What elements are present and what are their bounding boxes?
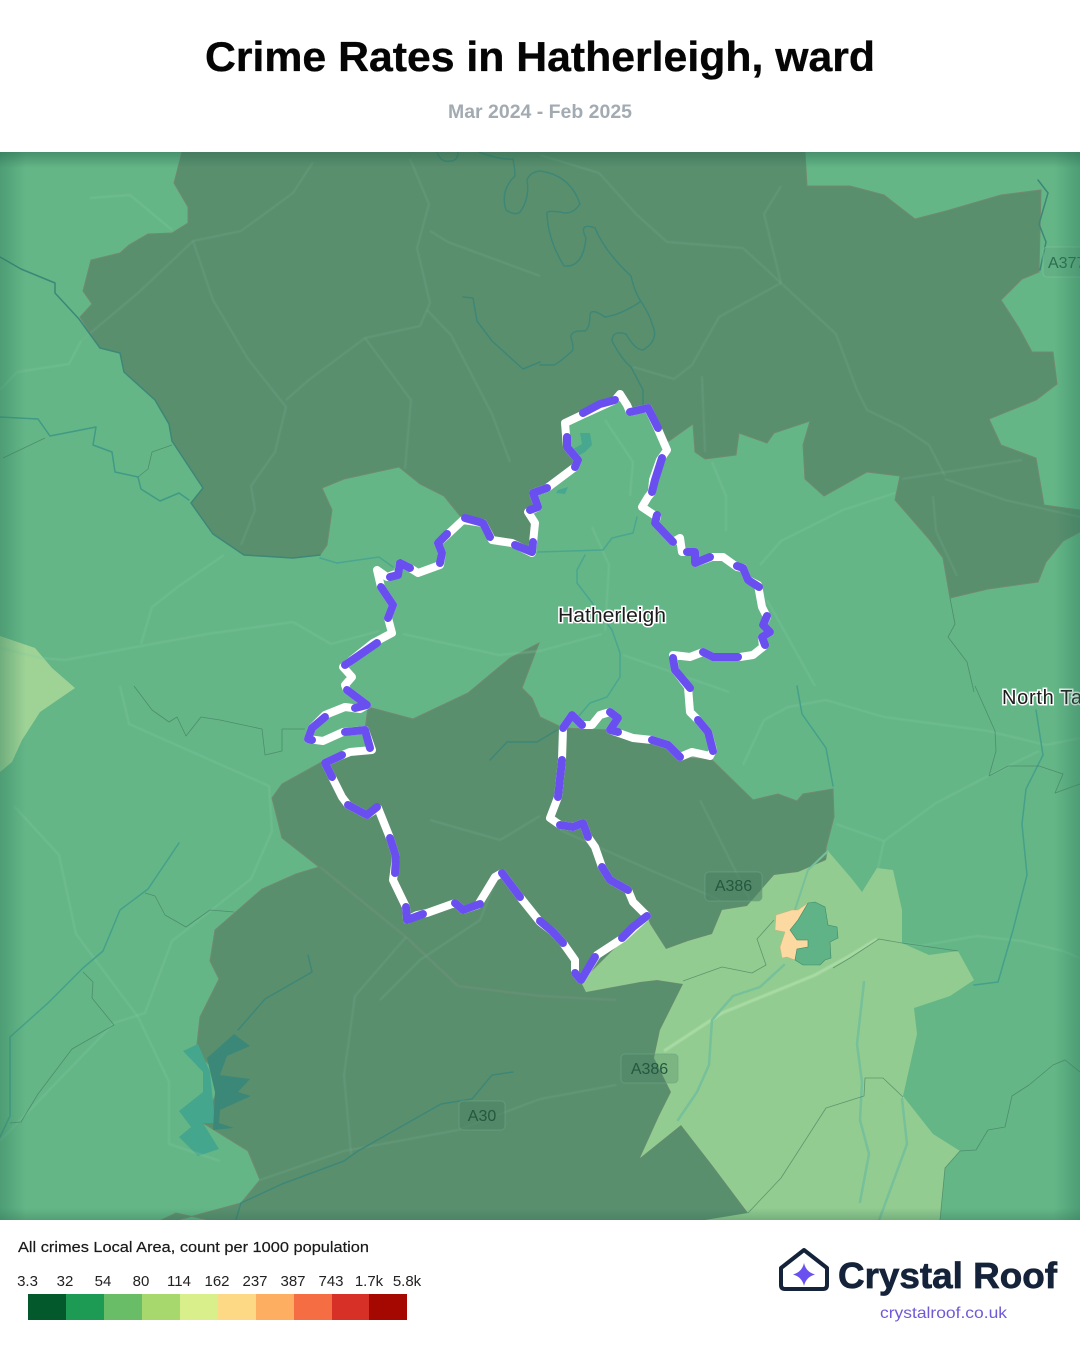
road label: A377: [1043, 247, 1080, 277]
roads: [0, 195, 1080, 1161]
region: northern dark green area: [80, 152, 1080, 598]
map: [0, 152, 1080, 1226]
road label: A30: A30: [468, 1108, 496, 1125]
legend colour scale: [28, 1294, 407, 1320]
road label: A30: [459, 1101, 505, 1130]
legend labels: 387: [280, 1273, 306, 1290]
reservoir: [179, 1034, 251, 1156]
legend labels: 743: [318, 1273, 344, 1290]
lakes near ward: [556, 433, 592, 494]
rivers: [0, 152, 1048, 1226]
legend labels: 5.8k: [393, 1273, 422, 1290]
legend title: All crimes Local Area, count per 1000 population: [18, 1239, 369, 1256]
region: far-left light green area: [0, 636, 75, 772]
road label: A386 lower: A386: [631, 1061, 668, 1078]
legend labels: 3.3: [17, 1273, 38, 1290]
legend labels: [17, 1273, 422, 1290]
legend: [17, 1239, 422, 1320]
legend labels: 32: [57, 1273, 73, 1290]
logo wordmark: Crystal Roof: [838, 1255, 1058, 1296]
legend labels: 237: [242, 1273, 268, 1290]
title: Crime Rates in Hatherleigh, ward: [205, 33, 875, 80]
logo: Crystal Roof: [781, 1250, 1058, 1322]
road label: A386 upper: A386: [715, 878, 752, 895]
thin boundaries: [3, 438, 1080, 1220]
small town: green area: [790, 902, 838, 965]
road label: A386 lower: [621, 1054, 678, 1083]
ward boundary: Hatherleigh: [308, 394, 770, 980]
map edge shading: [0, 152, 22, 1220]
road label: A386 upper: [705, 872, 762, 901]
small town: peach area: [775, 903, 808, 960]
legend labels: 114: [167, 1273, 191, 1290]
place label: Hatherleigh: Hatherleigh: [558, 605, 666, 627]
legend labels: 162: [204, 1273, 230, 1290]
subtitle: date range: Mar 2024 - Feb 2025: [448, 102, 632, 123]
website: crystalroof.co.uk: [880, 1305, 1008, 1322]
bright road through light area: [664, 939, 877, 1051]
region: southern dark green area: [157, 643, 834, 1225]
legend labels: 80: [133, 1273, 149, 1290]
region: central light green area: [581, 851, 974, 1220]
legend labels: 1.7k: [355, 1273, 384, 1290]
legend labels: 54: [95, 1273, 111, 1290]
icon: house with star: [781, 1250, 827, 1289]
